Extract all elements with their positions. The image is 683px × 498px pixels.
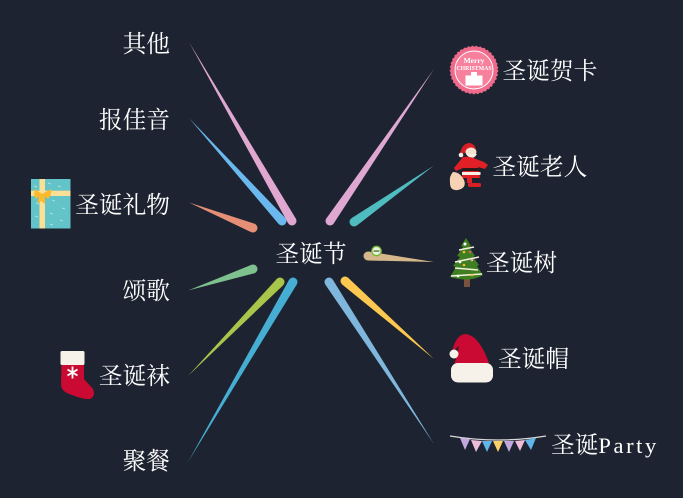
branch: 圣诞树 [364,252,434,262]
branch: 圣诞贺卡 [326,69,434,226]
branch: 颂歌 [188,264,258,290]
label: 报佳音: 报佳音 [99,101,170,135]
label: 圣诞树: 圣诞树 [486,244,557,278]
branch: 其他 [189,42,296,226]
label: 圣诞帽: 圣诞帽 [498,340,569,374]
label: 圣诞礼物: 圣诞礼物 [75,186,170,220]
label: 圣诞Party: 圣诞Party [551,426,659,460]
icon: greeting card badge: Merry [464,56,485,65]
label: 圣诞贺卡: 圣诞贺卡 [502,52,597,86]
label: 颂歌: 颂歌 [123,272,170,306]
label: 圣诞袜: 圣诞袜 [99,357,170,391]
icon: Christmas tree [450,238,483,287]
icon: collapse button [372,246,381,256]
icon: greeting card badge: CHRISTMAS [456,66,492,72]
label: 其他: 其他 [123,25,170,59]
branch: 报佳音 [189,118,286,226]
central topic: 圣诞节: 圣诞节 [275,235,347,269]
icon: stocking [60,351,94,399]
icon: gift box [31,179,70,228]
label: 聚餐: 聚餐 [123,442,170,476]
icon: Santa hat [450,334,493,382]
icon: Santa Claus [450,143,488,190]
branch: 圣诞Party [324,278,434,444]
branch: 圣诞礼物 [189,202,258,232]
icon: greeting card badge [450,46,498,94]
branch: 聚餐 [188,278,298,462]
branch: 圣诞老人 [350,166,434,226]
branch: 圣诞帽 [340,276,434,359]
branch: 圣诞袜 [188,278,284,376]
icon: bunting flags [450,436,546,452]
label: 圣诞老人: 圣诞老人 [492,148,587,182]
